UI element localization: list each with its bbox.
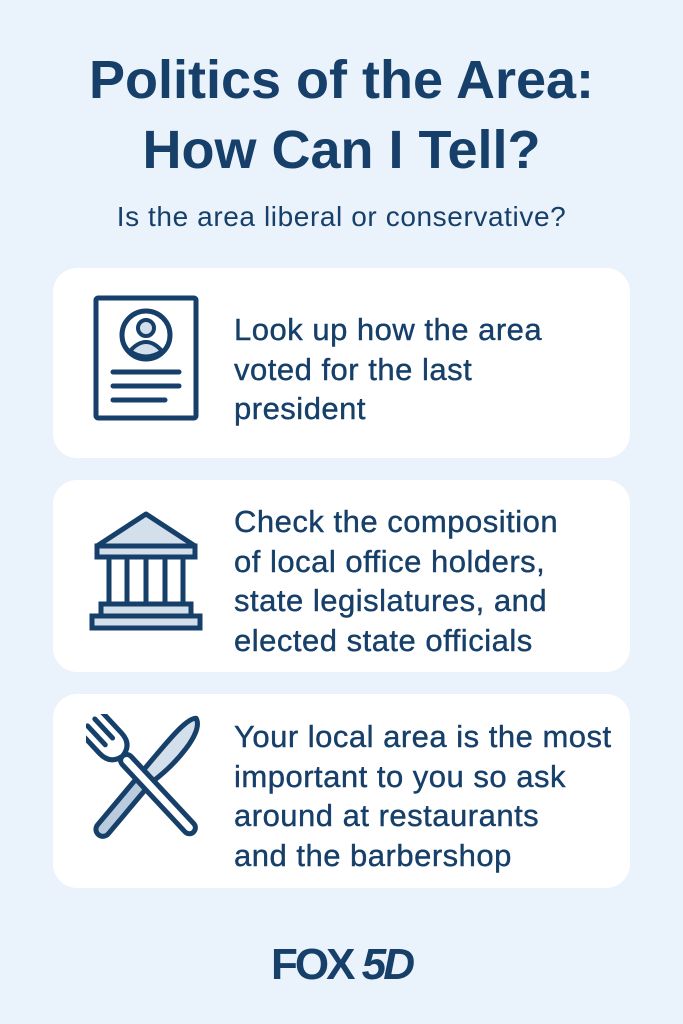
- text: vote: [234, 312, 542, 426]
- text: ask around: important to you so ask: [234, 758, 566, 794]
- text: officials: state legislatures, and: [234, 583, 547, 618]
- panel: officials: [53, 480, 630, 672]
- text: ask around: and the barbershop: [234, 838, 512, 872]
- text: officials: [234, 504, 558, 658]
- text: ask around: around at restaurants: [234, 798, 539, 833]
- text: officials: Check the composition: [234, 504, 558, 539]
- text: vote: Look up how the area: [234, 312, 542, 347]
- title: [89, 50, 594, 180]
- panel: ask around: [53, 694, 630, 888]
- text: ask around: Your local area is the most: [234, 719, 612, 754]
- icon: document with person: [94, 296, 198, 420]
- text: vote: voted for the last: [234, 352, 472, 386]
- text: officials: of local office holders,: [234, 544, 545, 578]
- logo: FOX 5D: [271, 940, 412, 989]
- title: How Can I Tell?: [142, 120, 540, 180]
- icon: fork and knife: [86, 714, 200, 839]
- panel: vote: [53, 268, 630, 458]
- subtitle: Is the area liberal or conservative?: [117, 201, 566, 232]
- icon: government building: [90, 512, 202, 630]
- text: officials: elected state officials: [234, 622, 533, 658]
- text: vote: president: [234, 391, 366, 426]
- title: Politics of the Area:: [89, 50, 594, 110]
- text: ask around: [234, 719, 612, 873]
